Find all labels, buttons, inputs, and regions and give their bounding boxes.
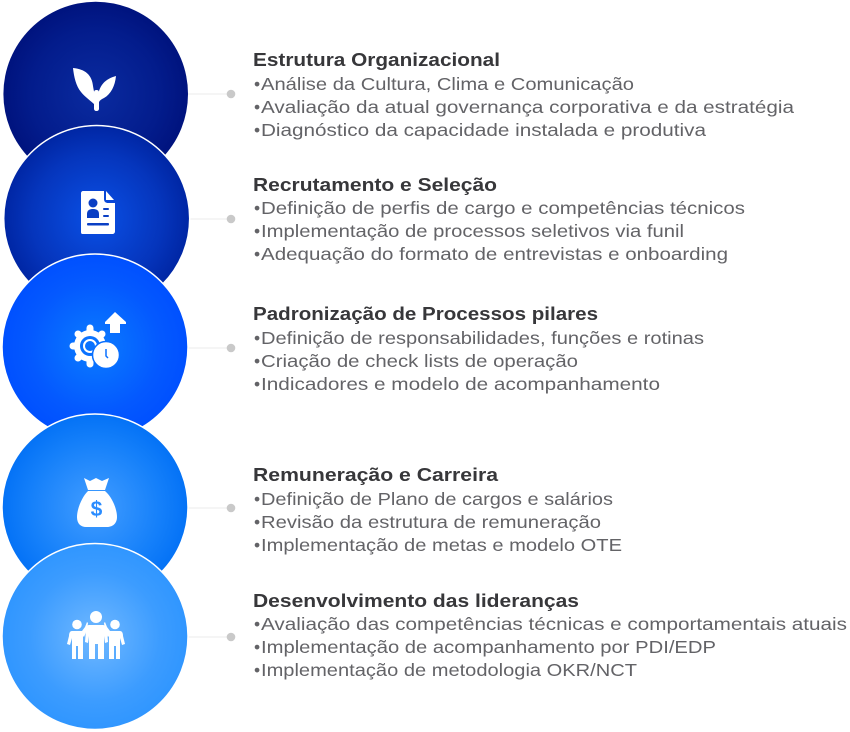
connector 1	[188, 90, 235, 98]
text block: Desenvolvimento das lideranças	[253, 590, 847, 680]
icon: group of people	[67, 611, 125, 659]
text block: Remuneração e Carreira: •	[254, 512, 260, 532]
connector 3	[188, 344, 235, 352]
text block: Remuneração e Carreira: Implementação de metas e modelo OTE	[261, 535, 622, 555]
text block: Estrutura Organizacional: •	[254, 120, 260, 140]
icon: gear, clock and arrow	[73, 312, 126, 368]
circle 3: bright blue	[2, 254, 188, 440]
text block: Recrutamento e Seleção: •	[254, 221, 260, 241]
text block: Estrutura Organizacional: •	[254, 97, 260, 117]
text block: Desenvolvimento das lideranças: •	[254, 637, 260, 657]
text block: Recrutamento e Seleção: Implementação de processos seletivos via funil	[261, 221, 684, 241]
text block: Recrutamento e Seleção	[253, 174, 745, 264]
text block: Desenvolvimento das lideranças: •	[254, 614, 260, 634]
text block: Remuneração e Carreira: •	[254, 535, 260, 555]
text block: Estrutura Organizacional: Avaliação da atual governança corporativa e da estratégia	[261, 97, 794, 117]
text block: Padronização de Processos pilares	[253, 303, 704, 394]
text block: Estrutura Organizacional: Estrutura Organizacional	[253, 49, 500, 70]
text block: Remuneração e Carreira: •	[254, 489, 260, 509]
circle 4: medium blue	[2, 414, 188, 600]
text block: Desenvolvimento das lideranças: Implementação de metodologia OKR/NCT	[261, 660, 637, 680]
connector 4	[188, 504, 235, 512]
text block: Estrutura Organizacional	[253, 49, 794, 140]
text block: Remuneração e Carreira: Remuneração e Carreira	[253, 464, 499, 485]
text block: Padronização de Processos pilares: •	[254, 374, 260, 394]
text block: Padronização de Processos pilares: •	[254, 328, 260, 348]
text block: Remuneração e Carreira: Revisão da estrutura de remuneração	[261, 512, 601, 532]
text block: Recrutamento e Seleção: Adequação do formato de entrevistas e onboarding	[261, 244, 728, 264]
icon: sprout	[73, 68, 116, 111]
circle 2: royal blue	[4, 126, 190, 312]
text block: Remuneração e Carreira: Definição de Plano de cargos e salários	[261, 489, 613, 509]
connector 2	[188, 215, 235, 223]
text block: Padronização de Processos pilares: Definição de responsabilidades, funções e rotinas	[261, 328, 704, 348]
text block: Recrutamento e Seleção: •	[254, 198, 260, 218]
text block: Estrutura Organizacional: Diagnóstico da capacidade instalada e produtiva	[261, 120, 706, 140]
icon: resume document	[81, 191, 115, 234]
text block: Padronização de Processos pilares: Padronização de Processos pilares	[253, 303, 598, 324]
text block: Recrutamento e Seleção: •	[254, 244, 260, 264]
text block: Recrutamento e Seleção: Definição de perfis de cargo e competências técnicos	[261, 198, 745, 218]
circle 1: dark navy	[3, 2, 188, 186]
text block: Desenvolvimento das lideranças: Desenvolvimento das lideranças	[253, 590, 579, 611]
text block: Desenvolvimento das lideranças: •	[254, 660, 260, 680]
text block: Remuneração e Carreira	[253, 464, 622, 555]
text block: Recrutamento e Seleção: Recrutamento e Seleção	[253, 174, 497, 195]
text block: Estrutura Organizacional: •	[254, 74, 260, 94]
text block: Desenvolvimento das lideranças: Implementação de acompanhamento por PDI/EDP	[261, 637, 716, 657]
circle 5: light blue	[2, 544, 188, 730]
text block: Desenvolvimento das lideranças: Avaliação das competências técnicas e comportamentais atuais	[261, 614, 847, 634]
text block: Padronização de Processos pilares: Criação de check lists de operação	[261, 351, 578, 371]
text block: Padronização de Processos pilares: •	[254, 351, 260, 371]
icon: money bag: $	[91, 498, 103, 521]
text block: Padronização de Processos pilares: Indicadores e modelo de acompanhamento	[261, 374, 660, 394]
icon: money bag	[77, 478, 117, 527]
text block: Estrutura Organizacional: Análise da Cultura, Clima e Comunicação	[261, 74, 634, 94]
connector 5	[188, 633, 235, 641]
